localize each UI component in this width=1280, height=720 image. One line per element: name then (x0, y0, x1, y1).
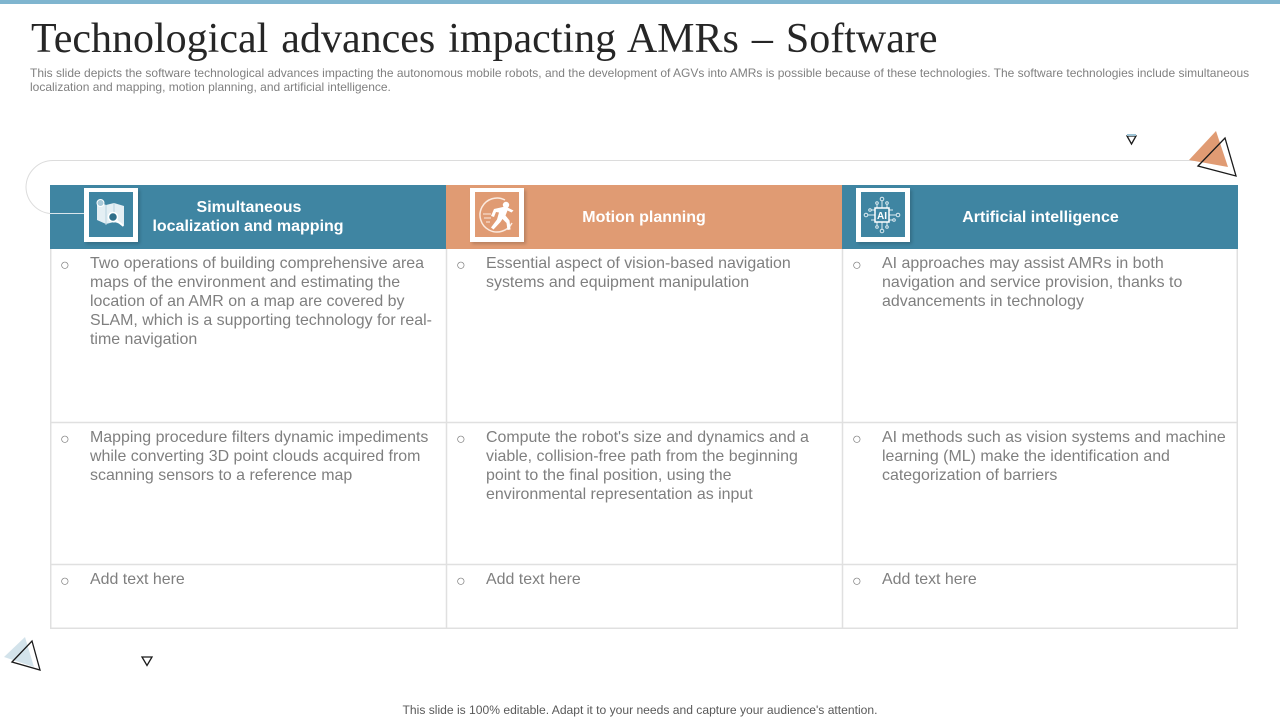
text: AI methods: learning (ML) make the identification and (882, 448, 1170, 465)
bullet: column 2 row 3: ○ (456, 573, 466, 590)
connector stub (50, 213, 84, 214)
header: Simultaneous localization and mapping (50, 185, 446, 249)
heading text: Artificial intelligence (962, 209, 1119, 226)
bullet: column 3 row 3: ○ (852, 573, 862, 590)
text: SLAM description: time navigation (90, 331, 197, 348)
icon: running figure in circle (470, 188, 524, 242)
text: mapping procedure (90, 429, 428, 484)
text: placeholder column 2: Add text here (486, 571, 581, 588)
subtitle description (30, 66, 1249, 94)
bullet: column 1 row 3: ○ (60, 573, 70, 590)
text: AI methods: AI methods such as vision systems and machine (882, 429, 1226, 446)
icon: AI chip: AI (877, 211, 887, 222)
text: SLAM description: location of an AMR on a map are covered by (90, 293, 405, 310)
bullet: column 3 row 2: ○ (852, 431, 862, 448)
text: mapping procedure: while converting 3D point clouds acquired from (90, 448, 420, 465)
top accent bar (0, 0, 1280, 4)
subtitle description: This slide depicts the software technological advances impacting the autonomous mobile robots, and the development of AGVs into AMRs is possible because of these technologies. The software technologies include simultaneous (30, 66, 1249, 80)
header: Motion planning (446, 185, 842, 249)
bullet: column 2 row 2: ○ (456, 431, 466, 448)
text: compute path (486, 429, 809, 503)
text: mapping procedure: Mapping procedure filters dynamic impediments (90, 429, 428, 446)
subtitle description: localization and mapping, motion planning, and artificial intelligence. (30, 80, 391, 94)
text: SLAM description: SLAM, which is a supporting technology for real- (90, 312, 432, 329)
text: compute path: environmental representation as input (486, 486, 753, 503)
heading text: Motion planning (582, 209, 706, 226)
bullet: column 1 row 1: ○ (60, 257, 70, 274)
bullet: column 1 row 2: ○ (60, 431, 70, 448)
text: compute path: point to the final position, using the (486, 467, 731, 484)
text: compute path: viable, collision-free path from the beginning (486, 448, 798, 465)
footer note: This slide is 100% editable. Adapt it to your needs and capture your audience's attention. (403, 703, 877, 717)
heading text: localization and mapping (152, 218, 344, 234)
text: placeholder column 3: Add text here (882, 571, 977, 588)
bullet: column 2 row 1: ○ (456, 257, 466, 274)
text: SLAM description: Two operations of building comprehensive area (90, 255, 424, 272)
text: placeholder column 1: Add text here (90, 571, 185, 588)
text: vision-based navigation (486, 255, 791, 291)
text: mapping procedure: scanning sensors to a reference map (90, 467, 352, 484)
text: SLAM description (90, 255, 432, 348)
text: AI methods: categorization of barriers (882, 467, 1057, 484)
text: AI approaches: advancements in technology (882, 293, 1084, 310)
icon: bottom left triangles (4, 637, 154, 671)
bullet: column 3 row 1: ○ (852, 257, 862, 274)
table grid (50, 249, 1238, 629)
text: vision-based navigation: systems and equipment manipulation (486, 274, 749, 291)
header: Artificial intelligence (842, 185, 1238, 249)
icon: top right triangles (1126, 131, 1237, 177)
text: AI methods (882, 429, 1226, 484)
icon: map with magnifier (84, 188, 138, 242)
text: AI approaches: AI approaches may assist AMRs in both (882, 255, 1164, 272)
text: AI approaches (882, 255, 1182, 310)
text: compute path: Compute the robot's size and dynamics and a (486, 429, 809, 446)
heading text (152, 198, 344, 234)
heading text: Simultaneous (197, 198, 301, 216)
text: SLAM description: maps of the environment and estimating the (90, 274, 400, 291)
text: vision-based navigation: Essential aspect of vision-based navigation (486, 255, 791, 272)
icon: AI chip (856, 188, 910, 242)
title: Technological advances impacting AMRs – Software (31, 16, 938, 62)
text: AI approaches: navigation and service provision, thanks to (882, 274, 1182, 291)
